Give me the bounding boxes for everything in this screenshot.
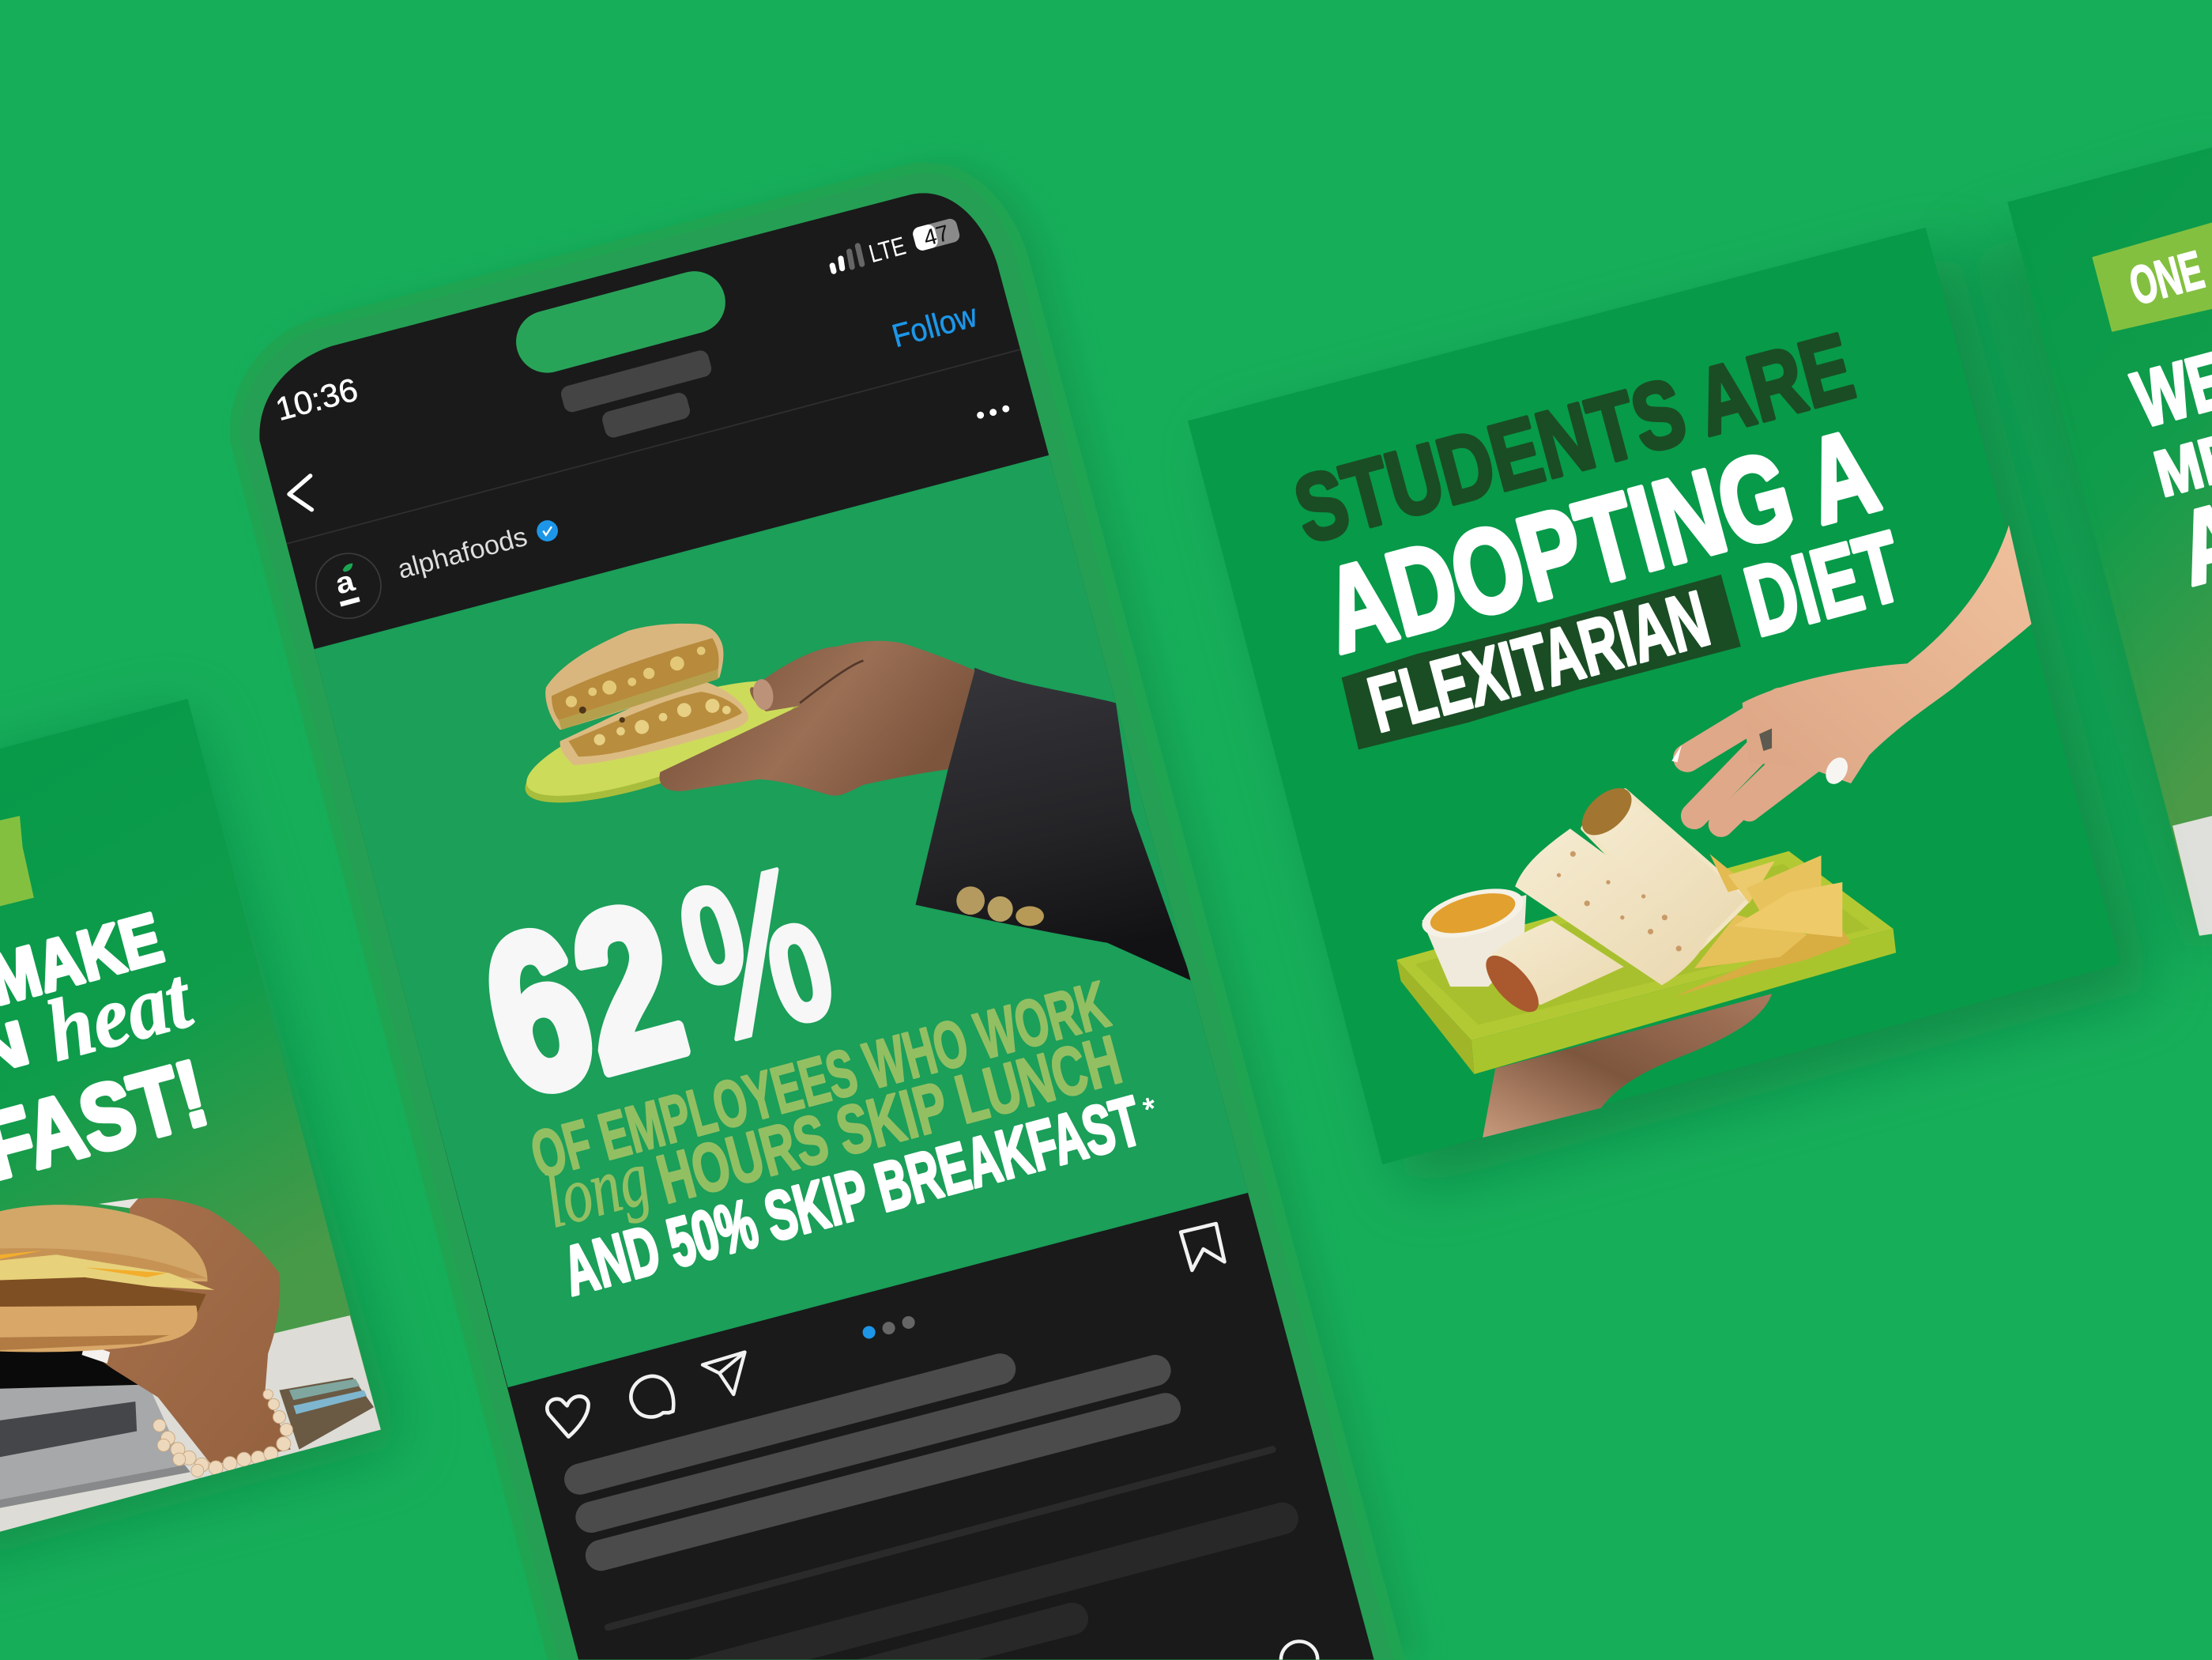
burrito lower	[1477, 920, 1624, 1021]
stat line: and 50% skip breakfast: AND 50% SKIP BREAKFAST	[556, 1081, 1149, 1310]
stat line: of employees who work: OF EMPLOYEES WHO WORK	[523, 967, 1116, 1192]
dynamic island	[509, 264, 733, 379]
post photo: stuffed pastry	[545, 624, 748, 765]
signal bars	[832, 246, 862, 271]
panel: flexitarian social card	[230, 163, 2153, 1660]
faded comment bars	[687, 1503, 1298, 1660]
more menu dots	[977, 406, 1009, 419]
placeholder title bar	[560, 349, 714, 414]
battery: 47	[921, 221, 952, 251]
header divider	[282, 349, 1023, 545]
panel: left social card	[0, 699, 402, 1567]
far card desk strip	[2172, 812, 2212, 936]
verified badge	[537, 520, 558, 541]
far card label tag	[2092, 217, 2212, 332]
upper hand reaching for food	[1671, 525, 2032, 824]
big stat: 62: 62	[462, 857, 704, 1142]
post photo: plate	[514, 658, 812, 826]
green tray	[1396, 851, 1896, 1074]
profile avatar	[316, 553, 381, 618]
left card hand holding sandwich	[79, 1198, 291, 1465]
headline: DIET: DIET	[1735, 511, 1913, 658]
carousel dots	[863, 1316, 915, 1339]
post photo: hand holding plate	[659, 641, 974, 795]
headline: STUDENTS ARE: STUDENTS ARE	[1284, 314, 1863, 564]
burrito upper	[1573, 779, 1749, 949]
stat script word: long: long	[535, 1133, 658, 1245]
torn label: FLEXITARIAN	[1342, 575, 1741, 749]
panel: right partial social card	[1968, 143, 2212, 945]
phone screen contents	[259, 193, 1374, 1660]
big stat: percent sign: %	[659, 816, 854, 1092]
caption placeholder bars	[580, 1369, 1272, 1628]
left card sandwich	[0, 1205, 214, 1352]
placeholder subtitle bar	[601, 390, 691, 440]
burrito large	[1515, 828, 1710, 985]
left card label tag	[0, 816, 34, 906]
back chevron	[289, 476, 312, 510]
stat line: hours skip lunch: HOURS SKIP LUNCH	[650, 1021, 1129, 1218]
footnote asterisk: *	[1140, 1091, 1160, 1127]
network label: LTE	[866, 231, 909, 268]
chips on tray	[1675, 854, 1851, 997]
bookmark icon	[1181, 1224, 1224, 1270]
lower hand holding tray	[1483, 994, 1772, 1137]
phone	[230, 163, 1425, 1660]
left card headline: heat: heat	[36, 948, 202, 1080]
account name: alphafoods	[394, 522, 530, 585]
battery	[911, 217, 962, 254]
profile avatar: a	[332, 564, 359, 601]
like heart icon	[547, 1396, 589, 1437]
post photo: suit sleeve with buttons	[916, 668, 1192, 981]
profile circle icon	[1281, 1641, 1317, 1660]
torn label: FLEXITARIAN: FLEXITARIAN	[1360, 575, 1718, 749]
left card pearl bracelet	[153, 1390, 292, 1477]
follow link: Follow	[888, 297, 981, 354]
status time: 10:36	[272, 371, 362, 428]
sauce cup	[1417, 879, 1528, 987]
headline: ADOPTING A: ADOPTING A	[1311, 404, 1890, 679]
left card desk and laptop photo	[0, 1315, 381, 1547]
send plane icon	[703, 1352, 745, 1394]
comment bubble icon	[631, 1376, 673, 1417]
instagram post background	[313, 455, 1249, 1387]
